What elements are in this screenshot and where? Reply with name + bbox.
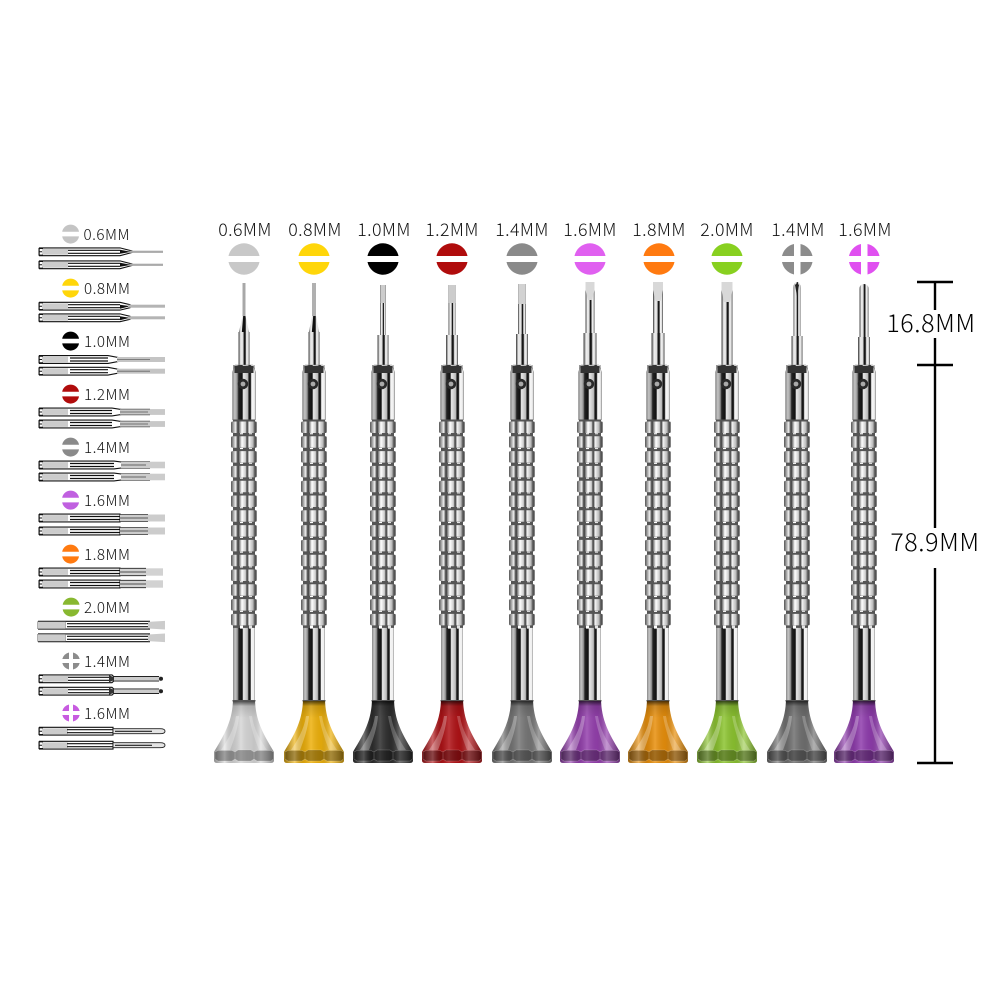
panel: size labels: 1.4MM bbox=[771, 216, 825, 242]
row: 1.2MM bbox=[38, 383, 165, 428]
icon: slotted 1.4 bbox=[506, 243, 538, 275]
row: 1.0MM bbox=[38, 330, 165, 375]
row: 1.4MM cross bbox=[38, 650, 163, 695]
row: 1.8MM bbox=[38, 543, 163, 588]
row: 1.0MM: 1.0MM bbox=[84, 330, 130, 352]
panel: size labels: 1.8MM bbox=[632, 216, 686, 242]
row: 1.8MM: 1.8MM bbox=[84, 543, 130, 565]
screwdriver 1.6MM purple bbox=[560, 282, 620, 763]
row: 2.0MM bbox=[38, 596, 165, 642]
row: 0.6MM: 0.6MM bbox=[84, 223, 130, 245]
row: 1.6MM cross bbox=[38, 702, 165, 749]
icon: slotted 2.0 bbox=[712, 243, 742, 275]
screwdriver 1.4MM grey bbox=[492, 284, 552, 763]
screwdriver 1.6MM cross purple bbox=[834, 284, 894, 763]
row: 1.4MM bbox=[38, 436, 165, 481]
panel: size labels: 1.4MM bbox=[495, 216, 549, 242]
dimension: handle length 78.9MM: 78.9MM bbox=[890, 523, 980, 559]
panel: size labels: 0.6MM bbox=[218, 216, 272, 242]
icon: slotted 0.8 bbox=[298, 243, 330, 275]
panel: colour tip icons bbox=[228, 243, 880, 275]
panel: size labels: 0.8MM bbox=[288, 216, 342, 242]
screwdriver 0.8MM gold bbox=[284, 283, 344, 763]
screwdriver 2.0MM green bbox=[697, 282, 757, 763]
row: 0.8MM bbox=[38, 277, 165, 322]
panel: size labels: 2.0MM bbox=[700, 216, 754, 242]
screwdriver 1.2MM red bbox=[422, 285, 482, 763]
panel: size labels: 1.6MM bbox=[563, 216, 617, 242]
icon: slotted 0.6 bbox=[228, 243, 260, 275]
screwdriver 1.4MM cross grey bbox=[767, 282, 827, 763]
panel: size labels: 1.2MM bbox=[425, 216, 479, 242]
screwdriver 0.6MM silver bbox=[214, 283, 274, 763]
panel: size labels: 1.0MM bbox=[357, 216, 411, 242]
row: 0.6MM bbox=[38, 223, 163, 269]
row: 1.6MM bbox=[38, 489, 165, 535]
icon: cross 1.4 bbox=[782, 244, 812, 274]
icon: slotted 1.2 bbox=[436, 243, 468, 275]
row: 1.2MM: 1.2MM bbox=[84, 383, 130, 405]
row: 2.0MM: 2.0MM bbox=[84, 596, 130, 618]
icon: slotted 1.0 bbox=[368, 243, 398, 275]
screwdriver 1.0MM black bbox=[353, 285, 413, 763]
panel: size labels: 1.6MM bbox=[838, 216, 892, 242]
row: 0.8MM: 0.8MM bbox=[84, 277, 130, 299]
dimension: tip length 16.8MM bbox=[886, 282, 976, 365]
row: 1.4MM cross: 1.4MM bbox=[84, 650, 130, 672]
row: 1.4MM: 1.4MM bbox=[84, 436, 130, 458]
panel: left size reference column bbox=[38, 223, 165, 749]
icon: cross 1.6 bbox=[849, 244, 880, 274]
icon: slotted 1.6 bbox=[574, 243, 606, 275]
screwdriver 1.8MM orange bbox=[628, 282, 688, 763]
dimension: handle length 78.9MM bbox=[890, 365, 980, 763]
dimension: tip length 16.8MM: 16.8MM bbox=[886, 304, 976, 340]
panel: size labels bbox=[218, 216, 892, 242]
icon: slotted 1.8 bbox=[644, 243, 674, 275]
row: 1.6MM: 1.6MM bbox=[84, 489, 130, 511]
row: 1.6MM cross: 1.6MM bbox=[84, 702, 130, 724]
